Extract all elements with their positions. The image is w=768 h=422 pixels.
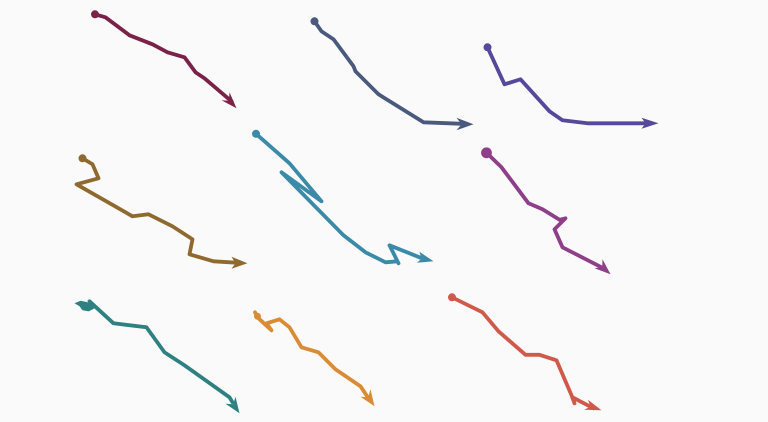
arrow: indigo [484, 43, 658, 129]
arrow: brown [76, 154, 248, 269]
arrow: slate [310, 17, 474, 130]
arrow: blue [252, 130, 434, 263]
arrow: teal [74, 301, 240, 413]
arrow: red [448, 293, 602, 410]
arrow: orange [254, 312, 374, 406]
arrow: maroon [91, 10, 236, 108]
arrow: purple [481, 147, 610, 274]
